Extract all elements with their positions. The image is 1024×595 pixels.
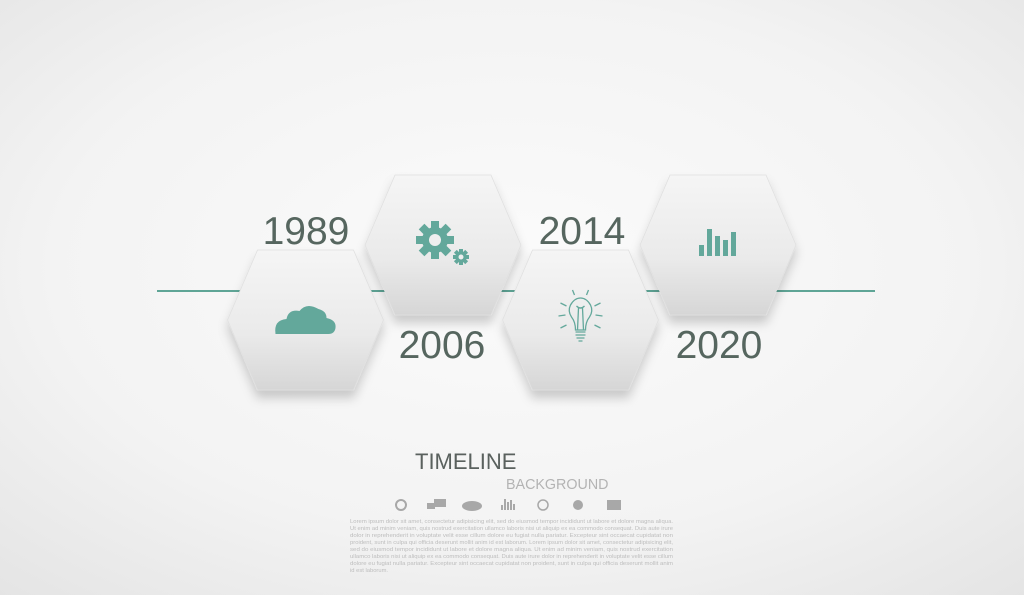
icon: gear small	[396, 500, 406, 510]
lorem ipsum text block: id est laborum.	[350, 568, 388, 574]
title: TIMELINE	[415, 449, 516, 474]
lorem ipsum text block: Lorem ipsum dolor sit amet, consectetur adipisicing elit, sed do eiusmod tempor incididunt ut labore et dolore magna aliqua.	[350, 519, 673, 525]
icon: clock	[538, 500, 548, 510]
icon: lightbulb	[558, 290, 602, 341]
icon: cloud	[275, 306, 336, 334]
year 2020: 2020	[676, 324, 762, 367]
hexagon: 2020 bar chart	[640, 175, 796, 315]
lorem ipsum text block: proident, sunt in culpa qui officia deserunt mollit anim id est laborum. Lorem ipsum dolor sit amet, consectetur adipisicing elit,	[350, 540, 673, 546]
lorem ipsum text block: Ut enim ad minim veniam, quis nostrud exercitation ullamco laboris nisi ut aliquip ex ea commodo consequat. Duis aute irure	[350, 526, 673, 532]
lorem ipsum text block: dolor in reprehenderit in voluptate velit esse cillum dolore eu fugiat nulla pariatur. Excepteur sint occaecat cupidatat non	[350, 533, 673, 539]
year 1989: 1989	[263, 210, 349, 253]
lorem ipsum text block: dolore eu fugiat nulla pariatur. Excepteur sint occaecat cupidatat non proident, sunt in culpa qui officia deserunt mollit anim	[350, 561, 673, 567]
icon: speech cloud	[462, 501, 482, 511]
icon: globe	[573, 500, 583, 510]
timeline line	[157, 290, 875, 292]
hexagon: 2014 lightbulb	[502, 250, 658, 390]
hexagon: 1989 cloud	[228, 250, 384, 390]
icon: folder	[607, 500, 621, 510]
icon: bars	[501, 499, 515, 510]
lorem ipsum text block: sed do eiusmod tempor incididunt ut labore et dolore magna aliqua. Ut enim ad minim veniam, quis nostrud exercitation	[350, 547, 673, 553]
hexagon: 2006 gears	[365, 175, 521, 315]
subtitle: BACKGROUND	[506, 477, 608, 493]
lorem ipsum text block: ullamco laboris nisi ut aliquip ex ea commodo consequat. Duis aute irure dolor in reprehenderit in voluptate velit esse cillum	[350, 554, 673, 560]
small icon row	[396, 499, 621, 511]
year 2006: 2006	[399, 324, 485, 367]
icon: bar chart	[699, 229, 736, 256]
year 2014: 2014	[539, 210, 625, 253]
icon: gears	[416, 221, 469, 265]
icon: chat bubbles	[427, 499, 446, 509]
lorem ipsum text block	[350, 519, 673, 574]
year labels	[263, 210, 762, 367]
